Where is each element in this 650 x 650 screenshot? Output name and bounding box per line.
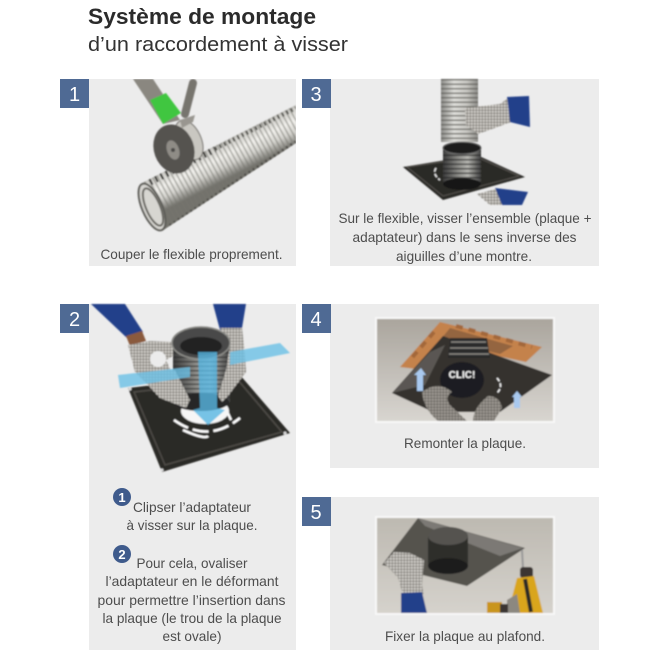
step badge 5: 5 (310, 502, 322, 524)
caption step 3: Sur le flexible, visser l’ensemble (plaque + (338, 210, 592, 226)
panel: step 5 (302, 497, 599, 650)
clic label: CLIC! (449, 370, 475, 381)
step 2 instructions: Pour cela, ovaliser (136, 555, 248, 571)
arrow: up right (512, 391, 522, 408)
arrow: up left (414, 368, 426, 391)
icon: clipping the adapter onto the plate (91, 304, 290, 472)
caption step 5: Fixer la plaque au plafond. (385, 628, 545, 644)
photo: raising the plate to the ceiling (375, 317, 555, 423)
title: Système de montage (88, 4, 316, 29)
caption step 4: Remonter la plaque. (404, 435, 526, 451)
step badge 5 (302, 497, 331, 526)
step 2 instructions: l’adaptateur en le déformant (106, 573, 279, 589)
step badge 3: 3 (310, 84, 322, 106)
arrow: blue left band (118, 367, 190, 388)
step 2 instructions: la plaque (le trou de la plaque (102, 610, 282, 626)
panel: step 4 (302, 304, 599, 468)
caption step 1: Couper le flexible proprement. (100, 246, 282, 262)
panel: step 1 (60, 79, 300, 266)
number 1 marker: 1 (118, 490, 126, 505)
step badge 1 (60, 79, 89, 108)
step badge 4: 4 (310, 309, 322, 331)
caption step 3: adaptateur) dans le sens inverse des (352, 229, 576, 245)
icon: screwing plate and adapter on the pipe (403, 79, 530, 205)
number 1 marker (113, 488, 131, 506)
step 2 instructions: pour permettre l’insertion dans (98, 592, 286, 608)
title (88, 4, 348, 56)
step badge 1: 1 (69, 84, 80, 106)
panel: step 3 (302, 79, 599, 266)
caption step 3 (338, 210, 592, 264)
step 2 instructions (98, 488, 286, 644)
arrow: blue down arrow (193, 352, 225, 425)
step 2 instructions: Clipser l’adaptateur (133, 499, 251, 515)
title: d’un raccordement à visser (88, 34, 348, 56)
step badge 2 (60, 304, 89, 333)
number 2 marker (113, 545, 131, 563)
step badge 4 (302, 304, 331, 333)
step badge 3 (302, 79, 331, 108)
step 2 instructions: à visser sur la plaque. (126, 517, 258, 533)
caption step 3: aiguilles d’une montre. (396, 248, 532, 264)
photo: fixing the plate to the ceiling with a drill (375, 516, 555, 615)
step 2 instructions: est ovale) (162, 628, 222, 644)
number 2 marker: 2 (118, 547, 126, 562)
icon: flexible pipe being cut with a grinder (133, 79, 300, 234)
arrow: blue right band (230, 343, 290, 365)
panel: step 2 (60, 304, 296, 650)
step badge 2: 2 (69, 309, 80, 331)
